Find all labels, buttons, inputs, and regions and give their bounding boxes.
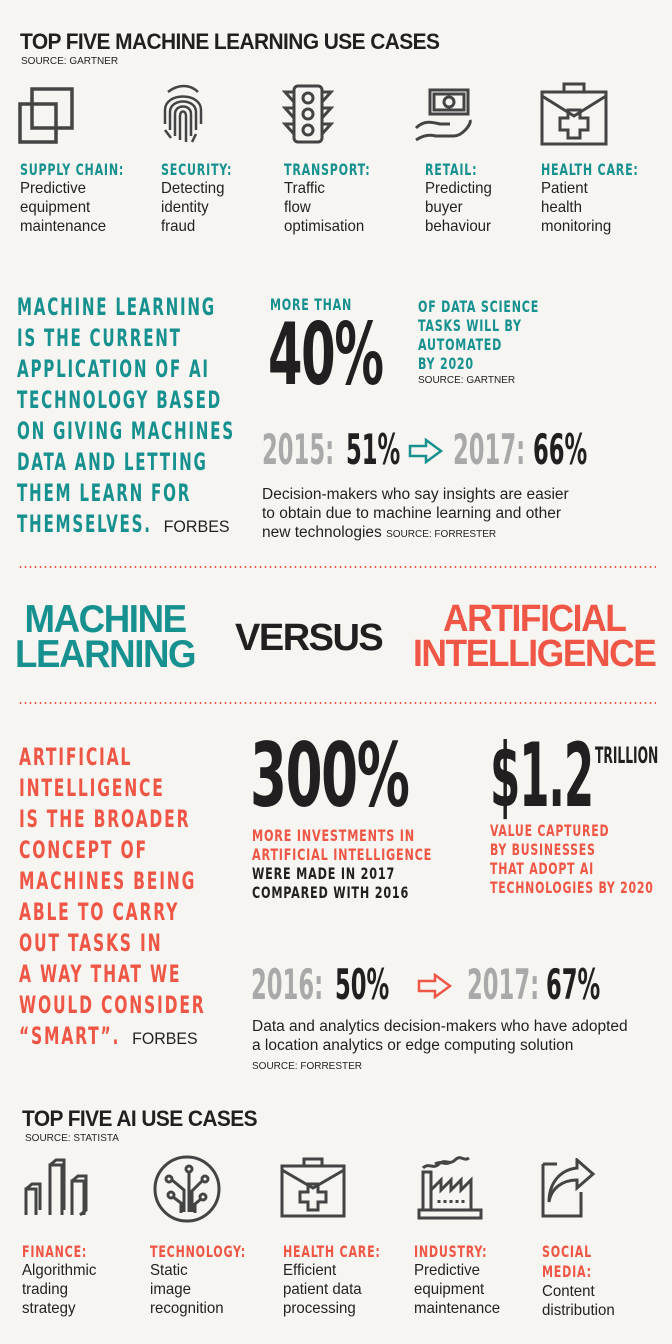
stat: 300%: 300%: [250, 724, 409, 827]
stat: 300%: WERE MADE IN 2017: [252, 864, 395, 883]
text: data science tasks: OF DATA SCIENCE: [418, 297, 539, 316]
icon: fingerprint: [164, 84, 202, 142]
heading: versus: VERSUS: [235, 617, 382, 659]
stat: 300%: COMPARED WITH 2016: [252, 883, 409, 902]
heading: artificial intelligence: INTELLIGENCE: [413, 633, 655, 675]
item: transport: TRANSPORT:: [284, 160, 370, 179]
panel: AI use cases: [22, 1156, 615, 1319]
item: social media: MEDIA:: [542, 1262, 592, 1281]
stat: $1.2 trillion: VALUE CAPTURED: [490, 821, 609, 840]
item: security: identity: [161, 199, 209, 216]
text: ML definition: APPLICATION OF AI: [17, 355, 210, 383]
item: supply chain: equipment: [20, 199, 90, 216]
text: decision-makers insights: new technologies SOURCE: FORRESTER: [262, 524, 496, 541]
item: technology: [150, 1242, 246, 1317]
item: health care: health: [541, 199, 582, 216]
text: data science tasks: SOURCE: GARTNER: [418, 375, 515, 386]
item: health care: HEALTH CARE:: [541, 160, 639, 179]
text: location analytics: [252, 1018, 628, 1072]
stat: 40%: MORE THAN: [270, 295, 352, 314]
item: supply chain: SUPPLY CHAIN:: [20, 160, 124, 179]
item: social media: Content: [542, 1283, 595, 1300]
stat: $1.2 trillion: $1.2: [490, 724, 593, 827]
stat: $1.2 trillion: BY BUSINESSES: [490, 840, 596, 859]
item: retail: buyer: [425, 199, 463, 216]
item: finance: strategy: [22, 1300, 76, 1317]
item: health care: Patient: [541, 180, 588, 197]
stat row: 2015 51% to 2017 66%: [262, 425, 587, 474]
item: health care: monitoring: [541, 218, 611, 235]
item: retail: behaviour: [425, 218, 491, 235]
icon: circuit circle: [154, 1156, 220, 1222]
item: health care: HEALTH CARE:: [283, 1242, 381, 1261]
stat: $1.2 trillion: THAT ADOPT AI: [490, 859, 594, 878]
icon: traffic light: [282, 84, 334, 144]
stat: 300%: [250, 724, 432, 902]
stat row: 2016 50% to 2017 67%: 67%: [546, 960, 600, 1009]
item: health care: patient data: [283, 1281, 362, 1298]
item: transport: [284, 160, 370, 235]
item: finance: trading: [22, 1281, 68, 1298]
stat row: 2016 50% to 2017 67%: 2017:: [467, 960, 539, 1009]
title: AI use cases: TOP FIVE AI USE CASES: [22, 1106, 257, 1131]
item: industry: Predictive: [414, 1262, 480, 1279]
text: ML definition: ON GIVING MACHINES: [17, 417, 235, 445]
item: social media: SOCIAL: [542, 1242, 592, 1261]
source statista: SOURCE: STATISTA: [25, 1133, 119, 1144]
stat row: 2015 51% to 2017 66%: 51%: [346, 425, 400, 474]
icon: factory: [418, 1156, 482, 1220]
source gartner: SOURCE: GARTNER: [21, 56, 118, 67]
text: ML definition: THEM LEARN FOR: [17, 479, 191, 507]
item: transport: optimisation: [284, 218, 364, 235]
title: ML use cases: TOP FIVE MACHINE LEARNING USE CASES: [20, 29, 439, 54]
text: location analytics: SOURCE: FORRESTER: [252, 1061, 362, 1072]
arrow teal: [408, 438, 443, 464]
text: AI definition: IS THE BROADER: [19, 805, 190, 833]
text: ML definition: DATA AND LETTING: [17, 448, 208, 476]
icon: supply chain squares: [18, 87, 74, 144]
item: industry: INDUSTRY:: [414, 1242, 487, 1261]
icon: medical kit: [280, 1158, 346, 1218]
stat row: 2015 51% to 2017 66%: 2015:: [262, 425, 334, 474]
item: retail: [425, 160, 492, 235]
icon: bar chart: [24, 1158, 88, 1216]
text: AI definition: ABLE TO CARRY: [19, 898, 179, 926]
text: AI definition: INTELLIGENCE: [19, 774, 165, 802]
icon: hand with money: [415, 88, 472, 142]
heading: machine learning: LEARNING: [15, 633, 195, 676]
stat: 300%: MORE INVESTMENTS IN: [252, 826, 415, 845]
stat row: 2016 50% to 2017 67%: 2016:: [251, 960, 323, 1009]
stat row: 2015 51% to 2017 66%: 2017:: [453, 425, 525, 474]
item: retail: Predicting: [425, 180, 492, 197]
text: AI definition: ARTIFICIAL: [19, 743, 132, 771]
item: technology: TECHNOLOGY:: [150, 1242, 246, 1261]
item: technology: recognition: [150, 1300, 224, 1317]
text: ML definition: TECHNOLOGY BASED: [17, 386, 222, 414]
text: AI definition: “SMART”.: [19, 1022, 120, 1050]
heading: machine learning: [15, 598, 195, 676]
item: security: SECURITY:: [161, 160, 232, 179]
stat: $1.2 trillion: [490, 724, 658, 897]
item: retail: RETAIL:: [425, 160, 477, 179]
item: finance: FINANCE:: [22, 1242, 87, 1261]
text: data science tasks: TASKS WILL BY: [418, 316, 522, 335]
text: AI definition: A WAY THAT WE: [19, 960, 181, 988]
text: location analytics: Data and analytics decision-makers who have adopted: [252, 1018, 628, 1035]
stat row: 2015 51% to 2017 66%: 66%: [533, 425, 587, 474]
text: ML definition: IS THE CURRENT: [17, 324, 182, 352]
item: technology: image: [150, 1281, 191, 1298]
item: industry: maintenance: [414, 1300, 500, 1317]
text: ML definition: THEMSELVES.: [17, 510, 152, 538]
stat row: 2016 50% to 2017 67%: [251, 960, 600, 1009]
stat: $1.2 trillion: TECHNOLOGIES BY 2020: [490, 878, 654, 897]
text: data science tasks: [418, 297, 539, 386]
text: decision-makers insights: Decision-makers who say insights are easier: [262, 486, 569, 503]
item: transport: Traffic: [284, 180, 325, 197]
text: location analytics: a location analytics or edge computing solution: [252, 1037, 573, 1054]
text: AI definition: CONCEPT OF: [19, 836, 148, 864]
text: ML definition: FORBES: [163, 517, 229, 536]
stat: $1.2 trillion: TRILLION: [595, 744, 658, 769]
item: health care: processing: [283, 1300, 356, 1317]
text: ML definition: [17, 293, 235, 538]
text: AI definition: WOULD CONSIDER: [19, 991, 206, 1019]
text: AI definition: [19, 743, 206, 1050]
item: finance: Algorithmic: [22, 1262, 96, 1279]
text: data science tasks: AUTOMATED: [418, 335, 502, 354]
item: industry: equipment: [414, 1281, 484, 1298]
heading: machine learning: MACHINE: [24, 598, 186, 641]
item: industry: [414, 1242, 500, 1317]
stat: 40%: 40%: [268, 305, 383, 405]
item: social media: [542, 1242, 615, 1319]
stat row: 2016 50% to 2017 67%: 50%: [335, 960, 389, 1009]
text: decision-makers insights: [262, 486, 569, 541]
stat: 300%: ARTIFICIAL INTELLIGENCE: [252, 845, 432, 864]
item: security: Detecting: [161, 180, 225, 197]
item: security: [161, 160, 232, 235]
panel: ML use cases: [18, 82, 639, 235]
icon: medical kit: [540, 82, 608, 146]
item: transport: flow: [284, 199, 311, 216]
item: supply chain: Predictive: [20, 180, 86, 197]
text: data science tasks: BY 2020: [418, 354, 474, 373]
item: health care: [541, 160, 639, 235]
heading: artificial intelligence: [413, 598, 656, 675]
arrow red: [418, 973, 452, 999]
text: AI definition: MACHINES BEING: [19, 867, 196, 895]
item: technology: Static: [150, 1262, 188, 1279]
item: supply chain: maintenance: [20, 218, 106, 235]
item: social media: distribution: [542, 1302, 615, 1319]
text: decision-makers insights: to obtain due to machine learning and other: [262, 505, 561, 522]
heading: artificial intelligence: ARTIFICIAL: [443, 598, 625, 640]
text: AI definition: OUT TASKS IN: [19, 929, 162, 957]
text: AI definition: FORBES: [132, 1029, 197, 1048]
item: supply chain: [20, 160, 124, 235]
item: health care: Efficient: [283, 1262, 336, 1279]
item: finance: [22, 1242, 96, 1317]
item: health care: [283, 1242, 381, 1317]
text: ML definition: MACHINE LEARNING: [17, 293, 216, 321]
item: security: fraud: [161, 218, 195, 235]
icon: share: [542, 1158, 596, 1218]
